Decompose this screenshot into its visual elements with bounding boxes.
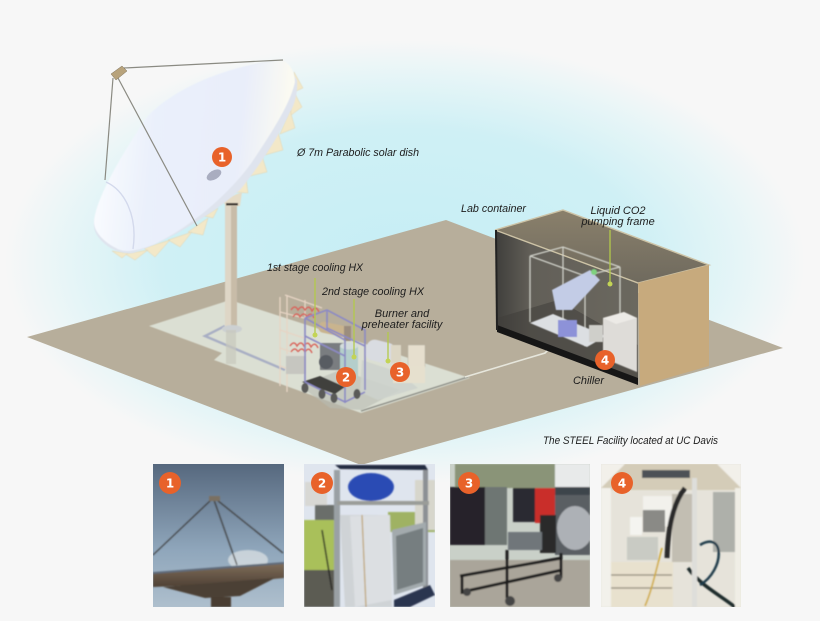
black base strip [497, 325, 638, 385]
badge 4 on chiller [595, 350, 615, 370]
horizontal drum [318, 321, 349, 338]
photo badge 2 [311, 472, 333, 494]
label: first stage cooling HX: 1st stage cooling HX [267, 262, 364, 274]
receiver [111, 66, 127, 80]
badge 2 on skid: 2 [342, 370, 350, 384]
label: lab container: Lab container [461, 203, 527, 215]
dish support tower [222, 192, 242, 364]
photo badge 3: 3 [465, 476, 473, 490]
photo 1: dish [153, 464, 284, 607]
label: parabolic dish: Ø 7m Parabolic solar dish [296, 147, 419, 159]
photo 3: burner [450, 464, 593, 607]
concrete slab [149, 300, 470, 413]
container floor [497, 300, 638, 384]
dish petals [112, 72, 303, 260]
pipe to lab container [465, 338, 553, 377]
burner grey block [360, 360, 418, 400]
container interior back walls [495, 210, 709, 283]
photo 2: cooling HX [304, 464, 435, 607]
parabolic solar dish [94, 60, 303, 260]
badge 3 on burner: 3 [396, 366, 404, 380]
cylinder HX [340, 346, 358, 378]
green leader lines [312, 230, 612, 364]
photo badge 1 [159, 472, 181, 494]
lab container [495, 210, 709, 386]
label: liquid CO2 pumping frame: Liquid CO2 [590, 205, 646, 217]
casters [302, 383, 360, 403]
label: burner and preheater: Burner and [375, 308, 430, 320]
badge 1 on dish: 1 [218, 150, 226, 164]
badge 2 on skid [336, 367, 356, 387]
label: chiller: Chiller [573, 375, 605, 387]
photo 4: lab interior [601, 464, 741, 607]
control cabinet [408, 345, 425, 367]
dish shaded segment [106, 182, 134, 249]
label: burner and preheater: preheater facility [361, 319, 444, 331]
photo badge 4 [611, 472, 633, 494]
chiller [603, 312, 637, 372]
label: second stage cooling HX: 2nd stage cooling HX [321, 286, 425, 298]
dark machine [320, 343, 344, 370]
first stage rack [280, 295, 322, 392]
dish rim [94, 60, 297, 253]
tank [286, 352, 306, 360]
badge 1 on dish [212, 147, 232, 167]
photo badge 1: 1 [166, 476, 174, 490]
label: liquid CO2 pumping frame: pumping frame [580, 216, 655, 228]
ground plane [27, 220, 783, 465]
blue frame [305, 310, 365, 403]
badge 3 on burner [390, 362, 410, 382]
photo badge 3 [458, 472, 480, 494]
badge 4 on chiller: 4 [601, 354, 609, 368]
dark left edge [496, 230, 497, 330]
dish center hole [205, 167, 223, 183]
burner drum [364, 338, 397, 365]
background glow [5, 40, 805, 484]
receiver struts [105, 60, 283, 226]
container glass front [495, 230, 638, 384]
red coils [290, 307, 319, 353]
caption: The STEEL Facility located at UC Davis [543, 435, 718, 447]
tan end wall [638, 265, 709, 386]
equipment: cooling and burner skid [280, 295, 425, 410]
grey footprint [300, 370, 400, 410]
rim [495, 210, 709, 283]
photo badge 2: 2 [318, 476, 326, 490]
pumping frame [530, 247, 620, 346]
pump skid [530, 269, 606, 347]
photo badge 4: 4 [618, 476, 626, 490]
dish face [94, 60, 295, 251]
